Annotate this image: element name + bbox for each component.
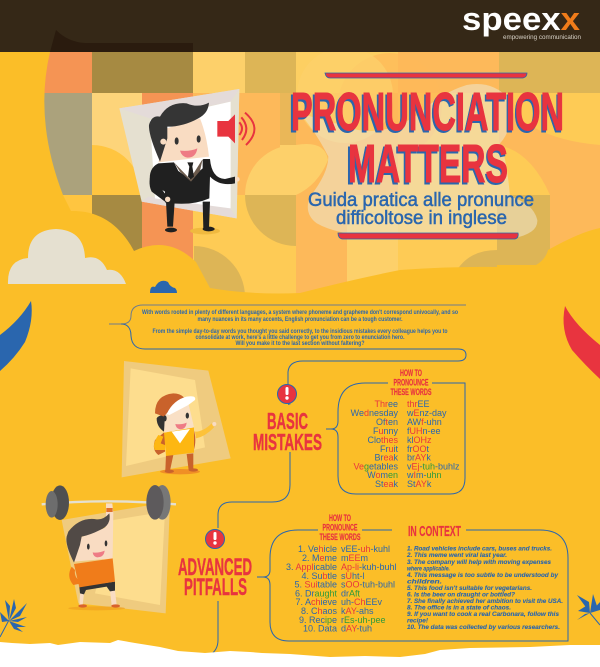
- pronunciation list: frOOt: [407, 444, 430, 454]
- subtitle: [308, 190, 534, 229]
- context sentences: 1. Road vehicles include cars, buses and trucks.: [407, 546, 552, 552]
- word list: 5. Suitable: [294, 580, 337, 590]
- legs: [165, 455, 173, 471]
- pronunciation list: dAY-tuh: [341, 624, 372, 634]
- hero background mosaic: [43, 47, 600, 297]
- word list: 10. Data: [303, 624, 337, 634]
- head: [158, 118, 209, 162]
- context sentences: 3. The company will help with moving expenses: [407, 559, 551, 566]
- pronunciation list: drAft: [341, 588, 361, 598]
- word list: 1. Vehicle: [298, 544, 337, 554]
- word list: 8. Chaos: [301, 606, 337, 616]
- context sentences: 5. This food isn't suitable for vegetarians.: [407, 585, 532, 592]
- heading: how to pronounce: PRONOUNCE: [322, 522, 358, 534]
- suit: [150, 159, 235, 204]
- intro text: consolidate at work, here's a little challenge to get you from zero to enunciation hero.: [196, 335, 405, 341]
- word list: 7. Achieve: [295, 597, 337, 607]
- shadow: [190, 228, 220, 234]
- intro text: many nuances in its many accents, English pronunciation can be a tough customer.: [198, 317, 403, 323]
- shirt: [74, 558, 115, 587]
- pronunciation list: wEnz-day: [406, 408, 447, 418]
- context sentences: 10. The data was collected by various researchers.: [407, 624, 560, 631]
- pronunciation list: brAYk: [407, 452, 431, 462]
- header bar: [0, 0, 600, 52]
- word list: Wednesday: [351, 408, 398, 418]
- heading: basic mistakes: BASIC: [267, 408, 308, 434]
- word list: [286, 544, 337, 634]
- collar and tie: [174, 159, 203, 179]
- heading: how to pronounce: THESE WORDS: [390, 387, 432, 398]
- heading: basic mistakes: [253, 408, 322, 455]
- heading: advanced pitfalls: PITFALLS: [184, 574, 247, 601]
- head: [74, 527, 113, 562]
- barbell: [42, 485, 176, 520]
- icon: alert bubble basic: [278, 384, 296, 405]
- subtitle: difficoltose in inglese: [336, 208, 507, 229]
- intro text: Will you make it to the last section without faltering?: [236, 341, 365, 347]
- body: [164, 427, 194, 456]
- frame: [119, 89, 239, 218]
- title backing blob: [300, 84, 537, 238]
- arm: [104, 503, 113, 558]
- word list: 4. Subtle: [301, 571, 337, 581]
- pronunciation list: [406, 399, 460, 489]
- title: bottom ornament: [338, 233, 518, 239]
- pronunciation list: vEj-tuh-buhlz: [407, 462, 460, 472]
- pronunciation list: mEEm: [341, 553, 368, 563]
- word list: Break: [374, 452, 398, 462]
- word list: Clothes: [367, 435, 398, 445]
- word list: Three: [374, 399, 398, 409]
- pronunciation list: kAY-ahs: [341, 606, 374, 616]
- cloud: [8, 229, 126, 284]
- word list: Women: [367, 470, 398, 480]
- heading: advanced pitfalls: [178, 554, 252, 601]
- pronunciation list: thrEE: [407, 399, 430, 409]
- panel: advanced pronunciation: [257, 513, 568, 641]
- pronunciation list: klOHz: [407, 435, 432, 445]
- heading: advanced pitfalls: ADVANCED: [178, 554, 252, 581]
- legs and shoes: [79, 593, 84, 605]
- word list: 3. Applicable: [286, 562, 337, 572]
- palm leaf left: [0, 599, 27, 637]
- word list: Fruit: [380, 444, 398, 454]
- pronunciation list: vEE-uh-kuhl: [341, 544, 390, 554]
- heading: how to pronounce: [320, 513, 360, 543]
- context sentences: [406, 546, 563, 631]
- intro text: With words rooted in plenty of different languages, a system where phoneme and grapheme don't correspond univocally, and so: [142, 310, 458, 316]
- pronunciation list: StAYk: [407, 479, 432, 489]
- context sentences: where applicable.: [407, 566, 450, 572]
- context sentences: 4. This message is too subtle to be understood by: [406, 572, 558, 579]
- small blue cloud: [150, 281, 177, 293]
- pronunciation list: AWf-uhn: [407, 417, 442, 427]
- palm leaf right: [577, 594, 600, 625]
- title: MATTERS: [346, 136, 507, 196]
- leaf: red right: [564, 306, 600, 379]
- connector to advanced: [218, 452, 290, 528]
- pronunciation list: sOO-tuh-buhl: [341, 580, 395, 590]
- legs and shoes: [166, 202, 175, 227]
- word list: 6. Draught: [295, 588, 337, 598]
- word list: Vegetables: [353, 462, 398, 472]
- title: MATTERS: [348, 134, 508, 194]
- head: [164, 403, 194, 433]
- title: top ornament: [325, 73, 527, 78]
- pronunciation list: wIm-uhn: [406, 470, 442, 480]
- word list: Funny: [373, 426, 398, 436]
- word list: Steak: [375, 479, 398, 489]
- subtitle: Guida pratica alle pronunce: [308, 190, 534, 211]
- logo: speexx: empowering communication: [503, 34, 581, 41]
- context sentences: recipe!: [407, 618, 428, 624]
- heading: how to pronounce: PRONOUNCE: [394, 378, 428, 388]
- heading: in context: IN CONTEXT: [408, 523, 461, 540]
- illustration: weightlifter: [42, 485, 176, 613]
- leaf: blue left: [0, 301, 32, 371]
- heading: basic mistakes: MISTAKES: [253, 429, 322, 455]
- pronunciation list: Ap-li-kuh-buhl: [341, 562, 397, 572]
- intro text: [142, 310, 458, 347]
- illustration: student in frame: [122, 361, 231, 477]
- title: [289, 82, 564, 196]
- connector below: [210, 601, 218, 655]
- pronunciation list: sUht-l: [341, 571, 365, 581]
- pronunciation list: fUHn-ee: [407, 426, 441, 436]
- illustration: businessman with megaphone: [119, 89, 254, 234]
- context sentences: 9. If you want to cook a real Carbonara, follow this: [407, 611, 559, 618]
- pronunciation list: [341, 544, 397, 634]
- heading: how to pronounce: HOW TO: [400, 368, 422, 379]
- context sentences: 8. The office is in a state of chaos.: [407, 604, 511, 612]
- heading: how to pronounce: HOW TO: [329, 513, 351, 524]
- word list: [351, 399, 398, 489]
- icon: alert bubble advanced: [206, 530, 224, 548]
- heading: how to pronounce: THESE WORDS: [320, 532, 360, 543]
- panel: basic pronunciation: [326, 368, 465, 494]
- pronunciation list: rEs-uh-pee: [341, 615, 386, 625]
- backpack: [154, 432, 165, 455]
- megaphone: [217, 113, 254, 145]
- word list: 9. Recipe: [299, 615, 337, 625]
- context sentences: children.: [407, 578, 442, 586]
- context sentences: 2. This meme went viral last year.: [406, 552, 507, 559]
- intro bracket: [109, 305, 466, 386]
- word list: Often: [376, 417, 398, 427]
- intro text: From the simple day-to-day words you thought you said correctly, to the insidious mistakes every colleague helps you to: [152, 329, 448, 335]
- pronunciation list: uh-ChEEv: [341, 597, 383, 607]
- logo: speexx: speexx: [462, 1, 580, 37]
- word list: 2. Meme: [302, 553, 337, 563]
- torn paper bottom edge: [0, 640, 600, 667]
- context sentences: 7. She finally achieved her ambition to visit the USA.: [407, 598, 563, 605]
- context sentences: 6. Is the beer on draught or bottled?: [407, 592, 515, 598]
- heading: how to pronounce: [390, 368, 432, 398]
